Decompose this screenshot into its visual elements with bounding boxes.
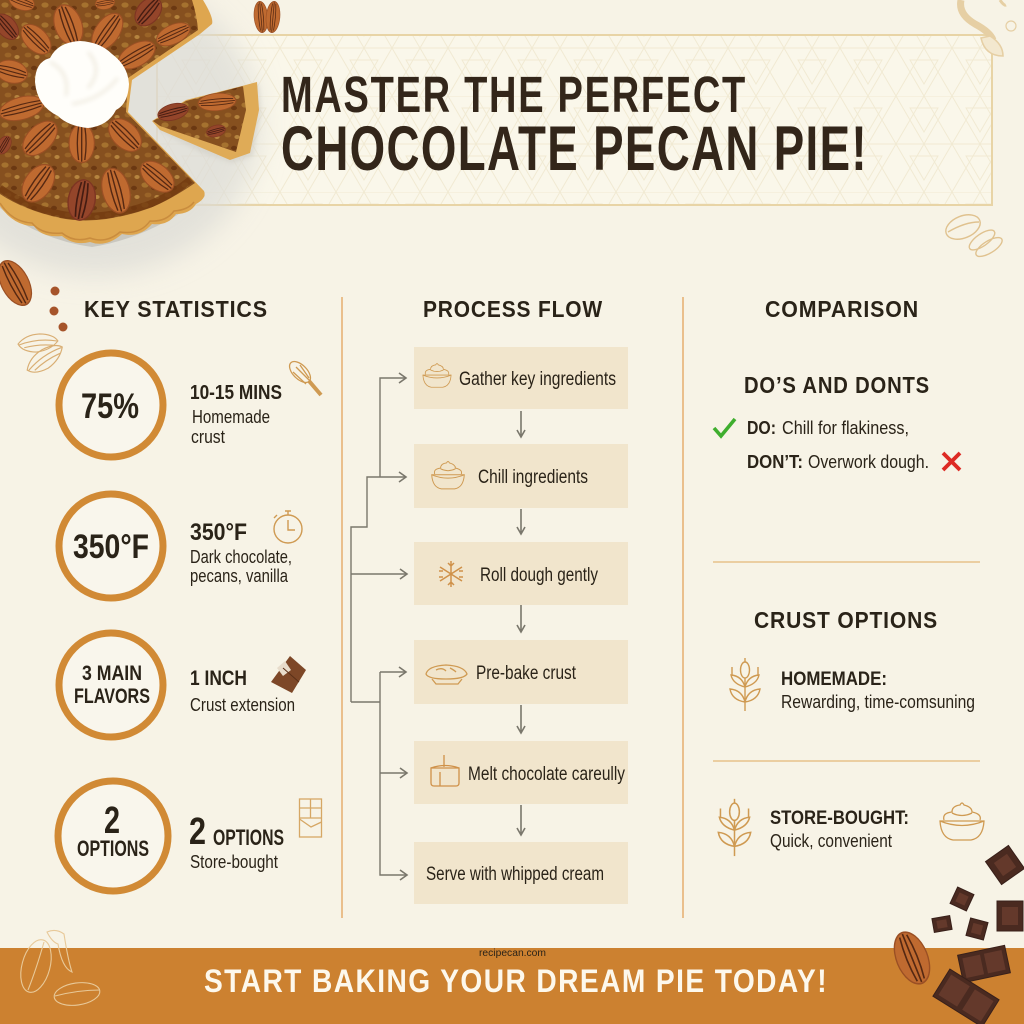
- title panel: [157, 35, 992, 205]
- icon: loose pecan top: [252, 0, 282, 34]
- stat: 2 options: OPTIONS: [213, 825, 284, 850]
- store-bought text: Quick, convenient: [770, 831, 892, 851]
- stat: 2 options: OPTIONS: [77, 836, 149, 861]
- stat: 350°F: 350°F: [190, 519, 247, 546]
- homemade text: [781, 669, 975, 712]
- stat: 3 main flavors: 1 INCH: [190, 667, 247, 690]
- icon: loose pecan and crumbs left: [0, 254, 67, 332]
- stat: 75%: [59, 353, 282, 457]
- stat: 2 options: 2: [189, 811, 206, 853]
- illustration: pie slice: [152, 82, 261, 163]
- subheading: crust options: CRUST OPTIONS: [754, 607, 938, 633]
- column dividers: [342, 297, 683, 918]
- store-bought text: [770, 808, 909, 851]
- stat: 350°F: pecans, vanilla: [190, 566, 289, 586]
- title: [281, 66, 868, 184]
- panel: process flow: [351, 296, 628, 904]
- stat: 75%: 75%: [81, 387, 139, 426]
- flow arrows down: [517, 411, 525, 835]
- stat: 350°F: Dark chocolate,: [190, 547, 292, 567]
- banner: [0, 948, 1024, 1024]
- icon: wheat homemade: [730, 658, 760, 711]
- step: chill ingredients: Chill ingredients: [478, 467, 588, 488]
- panel: key statistics: [58, 296, 322, 891]
- whipped cream: [35, 41, 129, 128]
- stat: 350°F: [59, 494, 292, 598]
- illustration: pecan pie with whipped cream: [0, 0, 260, 275]
- icon: stopwatch: [274, 511, 302, 543]
- flow connectors: [351, 373, 407, 880]
- stat: 3 main flavors: Crust extension: [190, 695, 295, 715]
- step: melt chocolate carefully: Melt chocolate careully: [468, 764, 625, 785]
- step: serve with whipped cream: Serve with whipped cream: [426, 864, 604, 885]
- stat: 2 options: [58, 781, 284, 891]
- step: melt chocolate carefully: [414, 741, 628, 804]
- icon: almond outlines left: [18, 333, 68, 378]
- icon: wheat store-bought: [718, 799, 751, 856]
- don't text: [747, 452, 929, 472]
- illustration: chocolate pieces and pecan: [886, 846, 1024, 1024]
- stat: 3 main flavors: [59, 633, 295, 737]
- icon: check mark: [714, 419, 735, 436]
- stat: 75%: 10-15 MINS: [190, 382, 282, 404]
- icon: chocolate wrapper: [300, 799, 322, 837]
- subheading: do's and donts: DO’S AND DONTS: [744, 372, 930, 398]
- icon: whisk: [286, 358, 321, 395]
- stat: 2 options: 2: [104, 800, 120, 842]
- stat: 2 options: Store-bought: [190, 852, 278, 872]
- banner text: START BAKING YOUR DREAM PIE TODAY!: [204, 963, 828, 999]
- stat: 75%: crust: [191, 427, 225, 447]
- don't text: DON’T:: [747, 452, 803, 472]
- stat: 3 main flavors: FLAVORS: [74, 685, 150, 708]
- step: roll dough gently: Roll dough gently: [480, 565, 598, 586]
- dividers: [713, 562, 980, 761]
- stat: 75%: Homemade: [192, 407, 270, 427]
- step: pre-bake crust: Pre-bake crust: [476, 663, 577, 684]
- homemade text: HOMEMADE:: [781, 669, 887, 690]
- don't text: Overwork dough.: [808, 452, 929, 472]
- homemade text: Rewarding, time-comsuning: [781, 692, 975, 712]
- title: MASTER THE PERFECT: [281, 66, 747, 123]
- stat: 3 main flavors: 3 MAIN: [82, 662, 142, 685]
- icon: nut outlines top right: [942, 210, 1005, 260]
- watermark: recipecan.com: [479, 948, 546, 959]
- icon: almond outlines banner: [15, 930, 101, 1008]
- heading: key statistics: KEY STATISTICS: [84, 296, 268, 322]
- heading: process flow: PROCESS FLOW: [423, 296, 603, 322]
- icon: cream bowl: [940, 803, 984, 840]
- icon: chocolate bar: [271, 656, 306, 693]
- icon: red cross: [943, 453, 960, 470]
- decoration: ribbon top right: [961, 0, 1016, 56]
- store-bought text: STORE-BOUGHT:: [770, 808, 909, 829]
- heading: comparison: COMPARISON: [765, 296, 919, 322]
- stat: 350°F: 350°F: [73, 528, 149, 566]
- step: serve with whipped cream: [414, 842, 628, 904]
- step: pre-bake crust: [414, 640, 628, 704]
- step: gather key ingredients: [414, 347, 628, 409]
- step: gather key ingredients: Gather key ingredients: [459, 369, 616, 390]
- do text: Chill for flakiness,: [782, 418, 909, 438]
- panel: comparison: [713, 296, 984, 856]
- step: roll dough gently: [414, 542, 628, 605]
- step: chill ingredients: [414, 444, 628, 508]
- do text: DO:: [747, 418, 776, 438]
